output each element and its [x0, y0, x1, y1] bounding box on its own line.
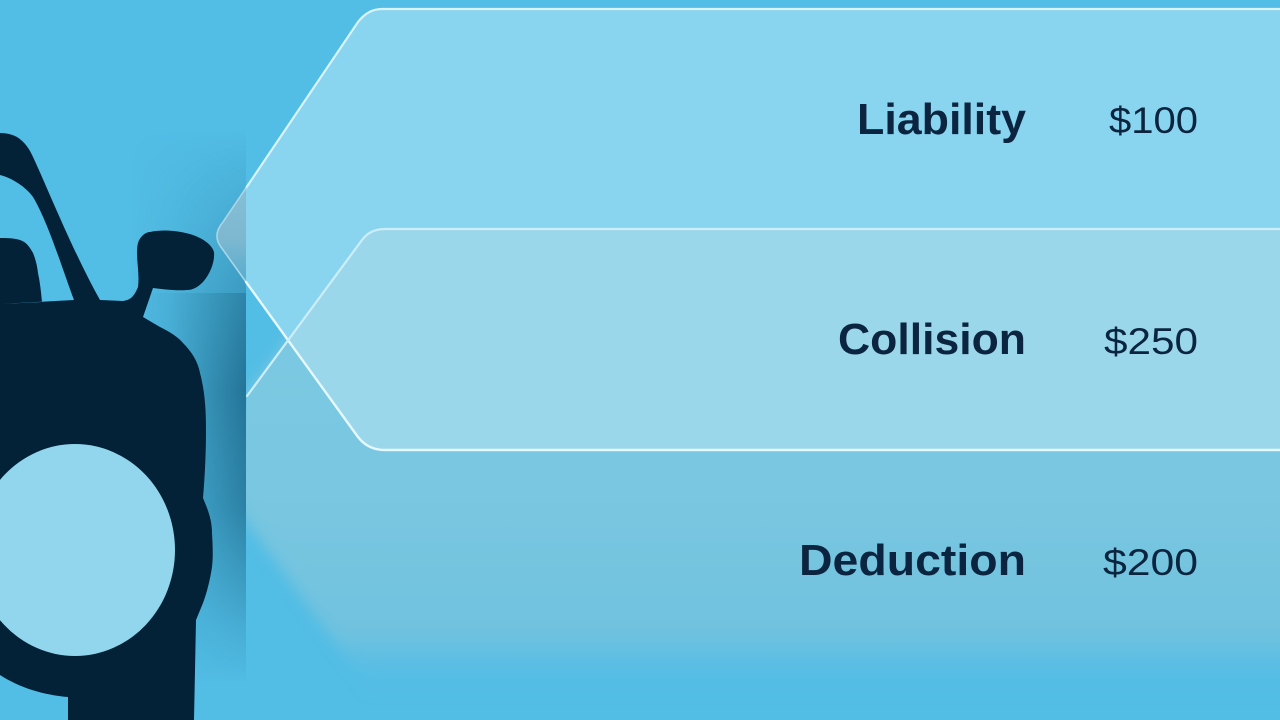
- shadow behind panels: [149, 164, 246, 659]
- icon: golf bag: [0, 133, 214, 720]
- value: $100: [1109, 100, 1198, 141]
- value: $250: [1104, 321, 1198, 362]
- panel: liability: [218, 190, 246, 280]
- bag silhouette with clubs: [0, 133, 214, 720]
- label: Liability: [857, 95, 1027, 144]
- panel outlines: [217, 9, 1280, 450]
- panel: collision: [290, 230, 1280, 449]
- label: Collision: [838, 315, 1026, 364]
- value: $200: [1103, 542, 1198, 583]
- panel tip: [218, 190, 246, 280]
- panel: deduction: [246, 336, 1280, 666]
- row: deduction: [799, 536, 1198, 585]
- label: Deduction: [799, 536, 1026, 585]
- row: liability: [857, 95, 1198, 144]
- row: collision: [838, 315, 1198, 364]
- bag pocket circle: [0, 444, 175, 656]
